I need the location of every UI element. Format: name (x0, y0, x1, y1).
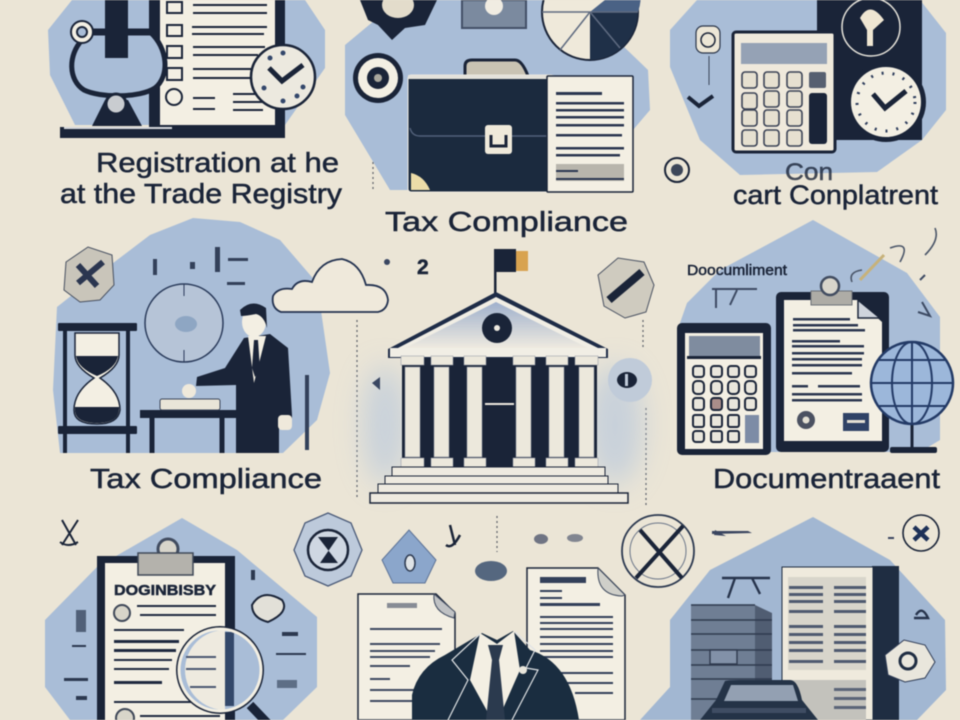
panel background (48, 0, 325, 125)
label: clipboard heading: DOGINBISBY (114, 582, 216, 599)
icon: clock (846, 62, 926, 142)
icon: tax document (547, 76, 633, 192)
heading: registration: at the Trade Registry (60, 178, 342, 209)
panel background (345, 0, 650, 190)
icon: glyph mark left (60, 520, 78, 545)
icon: clipboard document (97, 539, 235, 720)
icon: scribbles (722, 578, 928, 618)
panel: trade registry registration (48, 0, 325, 138)
icon: clipboard document (776, 277, 889, 452)
heading: compliance right: Con (785, 159, 833, 186)
icon: target ring (353, 53, 403, 103)
panel: business person with documents (358, 561, 625, 720)
colonnade (401, 356, 598, 467)
icon: briefcase (408, 60, 554, 192)
icon: wax seal with check (598, 258, 654, 318)
icon: small ring (665, 158, 689, 182)
icon: cloud (273, 259, 388, 312)
icon: circled x badge (903, 515, 939, 551)
heading: registration: Registration at he (96, 147, 339, 178)
label: small document text: Doocumliment (687, 262, 788, 279)
panel: accounting calculator and clock (670, 0, 946, 175)
pediment (388, 292, 608, 358)
panel: tax compliance briefcase (345, 0, 650, 192)
icon: seal (885, 640, 935, 682)
icon: hourglass (58, 323, 137, 453)
illustration: central courthouse (363, 249, 643, 503)
heading: tax compliance top: Tax Compliance (385, 206, 628, 237)
icon: pentagon badge (382, 530, 436, 583)
icon: globe (871, 342, 953, 453)
icon: faceless suit (412, 631, 579, 720)
icon: clock (251, 45, 315, 109)
panel background (670, 0, 946, 175)
icon: circle cross (622, 515, 694, 587)
panel background (45, 518, 317, 720)
heading: document management: Documentraaent (713, 463, 940, 494)
icon: ledger document (782, 567, 873, 720)
steps (370, 467, 628, 503)
icon: oval mark (475, 561, 507, 581)
icon: left document (358, 594, 455, 720)
icon: small side marks (64, 570, 306, 700)
heading: tax compliance middle: Tax Compliance (90, 463, 322, 494)
panel background (640, 517, 946, 720)
panel: document inspection (45, 518, 317, 720)
heading: compliance right (733, 159, 939, 210)
panel background (53, 218, 330, 453)
icon: small marks (712, 275, 930, 316)
icon: brick building (691, 605, 772, 720)
icon: pie chart (542, 0, 641, 60)
icon: calculator (677, 323, 771, 455)
panel: tax compliance person (53, 218, 388, 453)
flag (494, 249, 528, 295)
icon: businessman (182, 303, 292, 453)
icon: wax seal with cross (64, 247, 114, 302)
icon: clock dial (145, 284, 223, 362)
icon: right document (527, 568, 625, 720)
icon: microscope stamp (60, 0, 172, 138)
icon: car (700, 680, 818, 720)
panel background (680, 220, 940, 452)
icon: small marks (153, 247, 309, 450)
icon: registry checklist document (149, 0, 285, 138)
icon: key scribble (851, 228, 936, 282)
icon: hourglass octagon badge (294, 513, 362, 586)
icon: magnifying glass (177, 627, 272, 720)
icon: framed picture (462, 0, 526, 28)
icon: dash marks (534, 530, 894, 544)
icon: seal badge (360, 0, 437, 40)
icon: table with ledger (140, 399, 240, 453)
icon: small marks near centre: 2 (417, 256, 429, 279)
panel: documentation (677, 220, 953, 455)
icon: small marks near centre (372, 256, 429, 390)
icon: small glyph (446, 525, 460, 546)
icon: dark panel with circle (817, 0, 922, 140)
background glow (363, 365, 643, 485)
icon: small badge and check (688, 26, 720, 106)
heading: compliance right: cart Conplatrent (733, 180, 939, 210)
panel: company records (640, 517, 946, 720)
heading: registration (60, 147, 342, 209)
icon: dark book spine (872, 566, 899, 720)
icon: calculator (733, 32, 835, 152)
icon: round badge (608, 358, 652, 402)
